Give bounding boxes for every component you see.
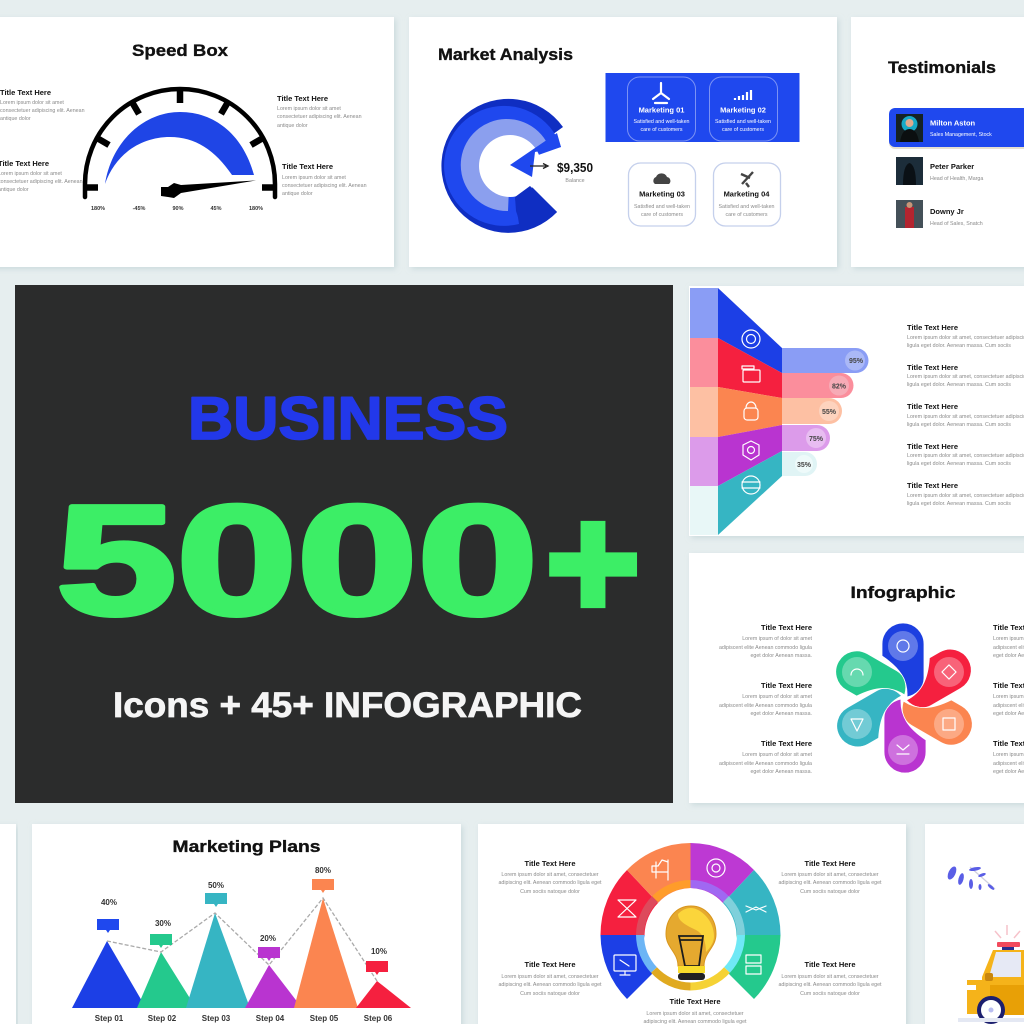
text block: lower left: Cum sociis natoque dolor bbox=[520, 991, 580, 997]
gauge scale labels: 90% bbox=[172, 206, 184, 212]
panel: market analysis bbox=[409, 17, 837, 267]
text block: lower right: Title Text Here bbox=[282, 162, 333, 171]
arrow: balance pointer bbox=[530, 164, 548, 168]
card: marketing 04: Satisfied and well-taken bbox=[719, 204, 775, 210]
text block: upper left: Lorem ipsum dolor sit amet bbox=[0, 100, 64, 106]
avatar: Milton Aston bbox=[896, 114, 923, 142]
chart: radial donut bbox=[441, 99, 563, 233]
gauge scale labels: 180% bbox=[249, 206, 263, 212]
heading: infographic: Infographic bbox=[850, 583, 956, 602]
text block: upper right: Title Text Here bbox=[277, 94, 328, 103]
text blocks: funnel descriptions: Title Text Here bbox=[907, 481, 958, 490]
chart: percentage labels bbox=[101, 866, 387, 956]
text blocks: funnel descriptions: ligula eget dolor. Aenean massa. Cum sociis bbox=[907, 343, 1011, 349]
panel: hero title bbox=[15, 285, 673, 803]
heading: market analysis: Market Analysis bbox=[438, 45, 573, 64]
text block: upper right: Lorem ipsum dolor sit amet, consectetuer bbox=[781, 872, 879, 878]
text blocks: funnel descriptions: ligula eget dolor. Aenean massa. Cum sociis bbox=[907, 422, 1011, 428]
card: Milton Aston highlighted bbox=[889, 108, 1024, 149]
chart: percentage labels: 50% bbox=[208, 881, 224, 890]
card: marketing 01 bbox=[628, 77, 696, 141]
panel: speed box bbox=[0, 17, 394, 267]
text block: upper left bbox=[498, 859, 602, 895]
text blocks: funnel descriptions: ligula eget dolor. Aenean massa. Cum sociis bbox=[907, 501, 1011, 507]
row: Peter Parker: Peter Parker bbox=[930, 162, 974, 171]
text block: lower left: Lorem ipsum dolor sit amet, consectetuer bbox=[501, 974, 599, 980]
text block: bottom centre: Lorem ipsum dolor sit amet, consectetuer bbox=[646, 1011, 744, 1017]
icon: lock bbox=[744, 402, 758, 420]
card: marketing 01: Satisfied and well-taken bbox=[634, 119, 690, 125]
gauge scale labels: 180% bbox=[91, 206, 105, 212]
balance value: Balance bbox=[565, 178, 585, 184]
heading: 5000+ bbox=[56, 474, 640, 651]
heading: 5000+: 5000 bbox=[56, 474, 538, 648]
text blocks: petal right bbox=[993, 623, 1024, 775]
card: marketing 02: care of customers bbox=[722, 127, 764, 133]
balance value bbox=[557, 160, 593, 184]
panel: testimonials bbox=[851, 17, 1024, 267]
text blocks: petal left: Lorem ipsum of dolor sit amet bbox=[742, 694, 813, 700]
chart: funnel left bands bbox=[690, 288, 718, 535]
panel: bulb infographic bbox=[478, 824, 906, 1024]
row: Peter Parker bbox=[896, 157, 983, 185]
icon: tri-blade bbox=[653, 83, 669, 103]
text block: lower right: consectetuer adipiscing elit. Aenean bbox=[282, 183, 367, 189]
text block: lower right: Lorem ipsum dolor sit amet, consectetuer bbox=[781, 974, 879, 980]
text blocks: funnel descriptions: ligula eget dolor. Aenean massa. Cum sociis bbox=[907, 382, 1011, 388]
text block: upper right: antique dolor bbox=[277, 123, 308, 129]
row: Downy Jr: Head of Sales, Snatch bbox=[930, 221, 983, 227]
heading: speed box: Speed Box bbox=[132, 41, 229, 60]
card: marketing 03 bbox=[628, 163, 696, 226]
text blocks: funnel descriptions: Title Text Here bbox=[907, 402, 958, 411]
icon: cloud bbox=[653, 173, 670, 184]
text blocks: funnel descriptions: Title Text Here bbox=[907, 442, 958, 451]
text block: upper left: Title Text Here bbox=[524, 859, 576, 868]
chart: dashed trend line bbox=[107, 898, 377, 981]
chart: percentage labels: 80% bbox=[315, 866, 331, 875]
text blocks: petal left: Title Text Here bbox=[761, 623, 812, 632]
text blocks: petal left: Title Text Here bbox=[761, 739, 812, 748]
chart: step labels: Step 01 bbox=[95, 1014, 124, 1023]
icon: globe bbox=[742, 476, 760, 494]
heading: testimonials: Testimonials bbox=[888, 58, 996, 77]
panel: funnel chart bbox=[689, 286, 1024, 536]
chart: percentage labels: 20% bbox=[260, 934, 276, 943]
balance value: $9,350 bbox=[557, 160, 593, 175]
text block: upper right bbox=[277, 94, 362, 129]
chart: percentage labels: 75% bbox=[809, 436, 824, 443]
text block: bottom centre bbox=[643, 997, 747, 1024]
text block: lower right: antique dolor bbox=[282, 191, 313, 197]
card: marketing 03: Satisfied and well-taken bbox=[634, 204, 690, 210]
icon: light bulb bbox=[666, 906, 716, 980]
text block: bottom centre: Title Text Here bbox=[670, 997, 720, 1006]
text blocks: funnel descriptions: Title Text Here bbox=[907, 323, 958, 332]
avatar: Peter Parker bbox=[896, 157, 923, 185]
text block: lower left: consectetuer adipiscing elit. Aenean bbox=[0, 179, 83, 185]
text block: lower right: Cum sociis natoque dolor bbox=[800, 991, 860, 997]
text block: upper left: antique dolor bbox=[0, 116, 31, 122]
text block: lower left bbox=[0, 159, 83, 193]
heading: marketing plans: Marketing Plans bbox=[172, 837, 320, 856]
text blocks: petal left: adipiscent elite Aenean commodo ligula bbox=[719, 645, 812, 651]
chart: percentage bars bbox=[782, 348, 868, 476]
text blocks: petal left: Lorem ipsum of dolor sit amet bbox=[742, 636, 813, 642]
row: Downy Jr: Downy Jr bbox=[930, 207, 964, 216]
icon: hexagon bbox=[743, 441, 759, 460]
subheading: icons count: Icons + 45+ INFOGRAPHIC bbox=[113, 686, 582, 725]
text blocks: petal left: Lorem ipsum of dolor sit amet bbox=[742, 752, 813, 758]
chart: percentage labels: 55% bbox=[822, 409, 837, 416]
chart: percentage labels: 10% bbox=[371, 947, 387, 956]
text block: upper right: Lorem ipsum dolor sit amet bbox=[277, 106, 341, 112]
card: Milton Aston highlighted: Sales Management, Stock bbox=[930, 132, 992, 138]
icon: shop bbox=[742, 366, 760, 382]
chart: percentage labels: 95% bbox=[849, 358, 864, 365]
text block: lower right bbox=[778, 960, 882, 997]
chart: percentage labels: 35% bbox=[797, 462, 812, 469]
icon: taxi car bbox=[958, 925, 1024, 1022]
chart: step labels: Step 02 bbox=[148, 1014, 177, 1023]
icon: plane bbox=[741, 172, 753, 187]
text blocks: petal left bbox=[719, 623, 813, 775]
text block: upper left bbox=[0, 88, 85, 122]
panel: left edge stub bbox=[0, 824, 16, 1024]
chart: percentage labels bbox=[795, 350, 865, 473]
icon: leaf sprig bbox=[946, 865, 995, 891]
text block: lower left: Title Text Here bbox=[524, 960, 576, 969]
text block: upper left: Title Text Here bbox=[0, 88, 51, 97]
text block: lower right bbox=[282, 162, 367, 197]
chart: six petals bbox=[828, 623, 980, 773]
card: marketing 02: Marketing 02 bbox=[720, 106, 766, 114]
text block: upper right: adipiscing elit. Aenean commodo ligula eget bbox=[778, 880, 882, 886]
text blocks: funnel descriptions: ligula eget dolor. Aenean massa. Cum sociis bbox=[907, 461, 1011, 467]
text block: upper right: Cum sociis natoque dolor bbox=[800, 889, 860, 895]
chart: percentage labels: 40% bbox=[101, 898, 117, 907]
text block: lower right: adipiscing elit. Aenean commodo ligula eget bbox=[778, 982, 882, 988]
text block: upper left: consectetuer adipiscing elit. Aenean bbox=[0, 108, 85, 114]
card: marketing 03: care of customers bbox=[641, 212, 683, 218]
chart: radial segments bbox=[600, 843, 780, 999]
card: marketing 01: care of customers bbox=[640, 127, 683, 133]
text blocks: petal left: Title Text Here bbox=[761, 681, 812, 690]
card: marketing 04 bbox=[714, 163, 780, 226]
row: Peter Parker: Head of Health, Marga bbox=[930, 176, 983, 182]
gauge needle bbox=[161, 180, 256, 198]
text blocks: funnel descriptions bbox=[907, 323, 1024, 507]
panel: petal infographic bbox=[689, 553, 1024, 803]
chart: step labels: Step 03 bbox=[202, 1014, 231, 1023]
text block: upper left: Lorem ipsum dolor sit amet, consectetuer bbox=[501, 872, 599, 878]
heading: BUSINESS: BUSINESS bbox=[188, 385, 508, 452]
card: marketing 02 bbox=[710, 77, 778, 141]
avatar: Downy Jr bbox=[896, 200, 923, 228]
gauge scale labels: 45% bbox=[210, 206, 222, 212]
text block: upper left: Cum sociis natoque dolor bbox=[520, 889, 580, 895]
icon: signal bars bbox=[735, 90, 751, 100]
panel: car illustration bbox=[925, 824, 1024, 1024]
chart: step labels: Step 04 bbox=[256, 1014, 285, 1023]
card: Milton Aston highlighted: Milton Aston bbox=[930, 118, 976, 128]
chart: percentage labels: 82% bbox=[832, 384, 847, 390]
card: marketing 03: Marketing 03 bbox=[639, 190, 685, 198]
chart: percentage labels: 30% bbox=[155, 919, 171, 928]
icons: petal discs bbox=[842, 631, 964, 765]
text block: lower right: Lorem ipsum dolor sit amet bbox=[282, 175, 346, 181]
card: marketing 02: Satisfied and well-taken bbox=[715, 119, 771, 125]
icons: segment glyphs bbox=[614, 859, 766, 975]
text block: lower left bbox=[498, 960, 602, 997]
text blocks: petal left: eget dolor Aenean massa. bbox=[750, 711, 812, 717]
chart: inner ring bbox=[640, 884, 741, 986]
heading: 5000+: + bbox=[546, 475, 640, 651]
chart: step labels: Step 06 bbox=[364, 1014, 393, 1023]
text block: upper right bbox=[778, 859, 882, 895]
chart: tags bbox=[97, 879, 388, 975]
gauge scale labels bbox=[91, 206, 263, 212]
gauge scale labels: -45% bbox=[133, 206, 146, 212]
icon: dollar bbox=[742, 330, 760, 348]
card: marketing 04: Marketing 04 bbox=[724, 190, 770, 198]
card: marketing 04: care of customers bbox=[725, 212, 768, 218]
gauge blue band bbox=[105, 112, 254, 184]
text blocks: petal left: adipiscent elite Aenean commodo ligula bbox=[719, 761, 812, 767]
text block: upper left: adipiscing elit. Aenean commodo ligula eget bbox=[498, 880, 602, 886]
text block: upper right: Title Text Here bbox=[804, 859, 856, 868]
chart: triangles bbox=[72, 898, 411, 1008]
chart: funnel coloured segments bbox=[718, 288, 782, 535]
text blocks: petal left: adipiscent elite Aenean commodo ligula bbox=[719, 703, 812, 709]
band: blue marketing cards bbox=[606, 73, 800, 142]
row: Downy Jr bbox=[896, 200, 983, 228]
chart: step labels bbox=[95, 1014, 393, 1023]
text block: lower right: Title Text Here bbox=[804, 960, 856, 969]
card: marketing 01: Marketing 01 bbox=[639, 106, 684, 114]
text blocks: petal left: eget dolor Aenean massa. bbox=[750, 653, 812, 659]
text blocks: funnel descriptions: Title Text Here bbox=[907, 363, 958, 372]
panel: marketing plans bbox=[32, 824, 461, 1024]
text block: lower left: adipiscing elit. Aenean commodo ligula eget bbox=[498, 982, 602, 988]
chart: step labels: Step 05 bbox=[310, 1014, 339, 1023]
text blocks: petal left: eget dolor Aenean massa. bbox=[750, 769, 812, 775]
text block: upper right: consectetuer adipiscing elit. Aenean bbox=[277, 114, 362, 120]
chart: speed gauge bbox=[85, 89, 275, 212]
